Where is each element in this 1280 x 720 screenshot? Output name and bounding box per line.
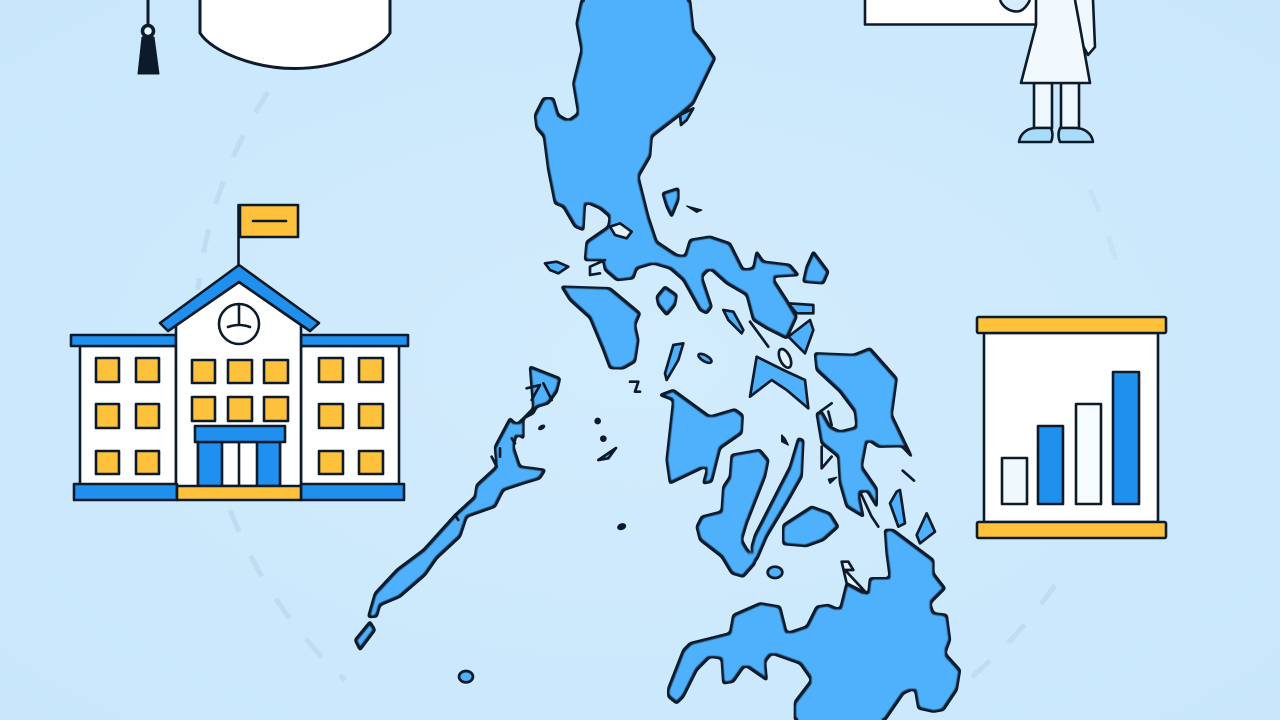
Palawan north inlet [455,383,552,520]
Laguna lake [610,223,632,238]
Bohol [783,507,838,546]
Guimaras [782,435,788,445]
Burias [723,310,743,333]
Catanduanes coast highlight [680,108,693,125]
top rail [977,317,1166,333]
map: Philippines [355,0,960,720]
Mindanao [668,530,960,720]
islet [617,523,626,531]
bottom rail [977,522,1166,538]
icon: graduation cap bottom [200,0,390,68]
Camiguin [768,567,782,578]
whiteboard [865,0,1037,24]
Samar [815,348,912,457]
islet [595,418,600,424]
Luzon top edge fill [585,0,687,4]
Dinagat [917,513,935,543]
map region: Palawan [355,367,640,682]
Masbate [750,357,808,408]
icon: bar chart board [977,317,1166,538]
Mindoro [562,287,640,368]
islet [788,303,813,313]
Surigao inlet [842,562,867,593]
islet [598,448,616,460]
legs [1034,83,1079,128]
Palawan landmass [355,367,560,650]
main Luzon landmasses [535,0,828,368]
Lubang [545,262,568,273]
board [984,333,1158,522]
central block [176,282,301,487]
Cagayancillo [459,671,473,682]
Ticao [776,347,794,370]
Marinduque [657,287,677,315]
Biliran [828,477,837,483]
Cebu [752,438,803,560]
icon: tassel [138,0,159,74]
islet curl [630,382,640,392]
right wing [301,335,408,485]
Tablas [665,343,683,380]
Polillo [663,188,678,217]
Panay [660,390,743,483]
windows: right wing [319,358,383,474]
flag [238,205,298,268]
Palawan [368,367,560,617]
main Visayas and Mindanao landmasses [660,348,960,720]
Siargao [890,490,905,527]
Luzon [535,0,798,338]
entrance [195,426,285,486]
curl islet [590,260,605,275]
windows: centre [192,360,288,421]
Masbate tip [788,320,813,353]
strait lines [820,403,878,527]
Sibuyan [697,352,713,365]
Balabac [355,622,375,650]
coast line [750,322,768,347]
islet [538,424,545,430]
map region: Visayas and Mindanao [660,343,960,720]
far arm [1075,0,1095,55]
islet [601,436,606,441]
icon: school building [71,205,408,500]
clock [219,304,259,344]
islet east of Samar [903,471,914,481]
dress [1021,0,1090,83]
Mindanao bottom edge fill [798,715,882,720]
Catanduanes [803,252,828,283]
icon: teacher at whiteboard [865,0,1095,142]
windows: left wing [96,358,159,474]
hand [1000,0,1030,11]
left wing [71,335,176,485]
Negros [697,450,768,577]
roof [160,265,319,331]
base [74,484,404,500]
bars [1002,372,1139,504]
feet [1019,128,1093,142]
small island [687,206,702,212]
Leyte [817,412,877,517]
map region: Luzon and nearby islands [535,0,828,368]
islets [538,382,640,531]
